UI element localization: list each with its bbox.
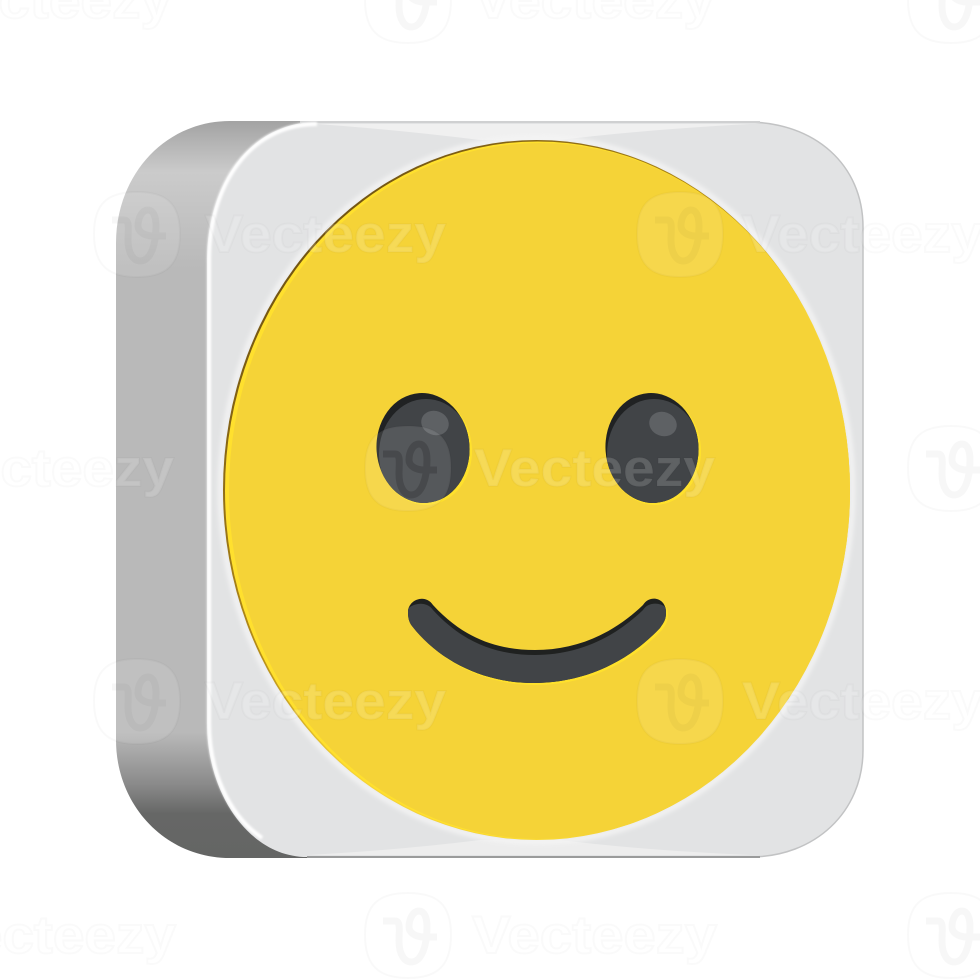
icon: right eye: [605, 393, 701, 505]
emoji icon illustration: [116, 121, 864, 858]
watermark: Vecteezy wordmarks: Vecteezy: [742, 672, 980, 731]
watermark: Vecteezy wordmarks: Vecteezy: [205, 205, 447, 264]
icon: yellow face: [220, 138, 852, 842]
watermark: Vecteezy wordmarks: Vecteezy: [474, 439, 716, 498]
watermark: Vecteezy wordmarks: Vecteezy: [205, 672, 447, 731]
icon: left eye: [376, 393, 472, 505]
icon: side wall of the tile: [116, 121, 330, 858]
watermark: Vecteezy wordmarks: Vecteezy: [742, 205, 980, 264]
watermark: Vecteezy wordmarks: Vecteezy: [472, 906, 718, 965]
icon: white tile front: [207, 122, 863, 857]
icon: smile: [408, 598, 668, 685]
